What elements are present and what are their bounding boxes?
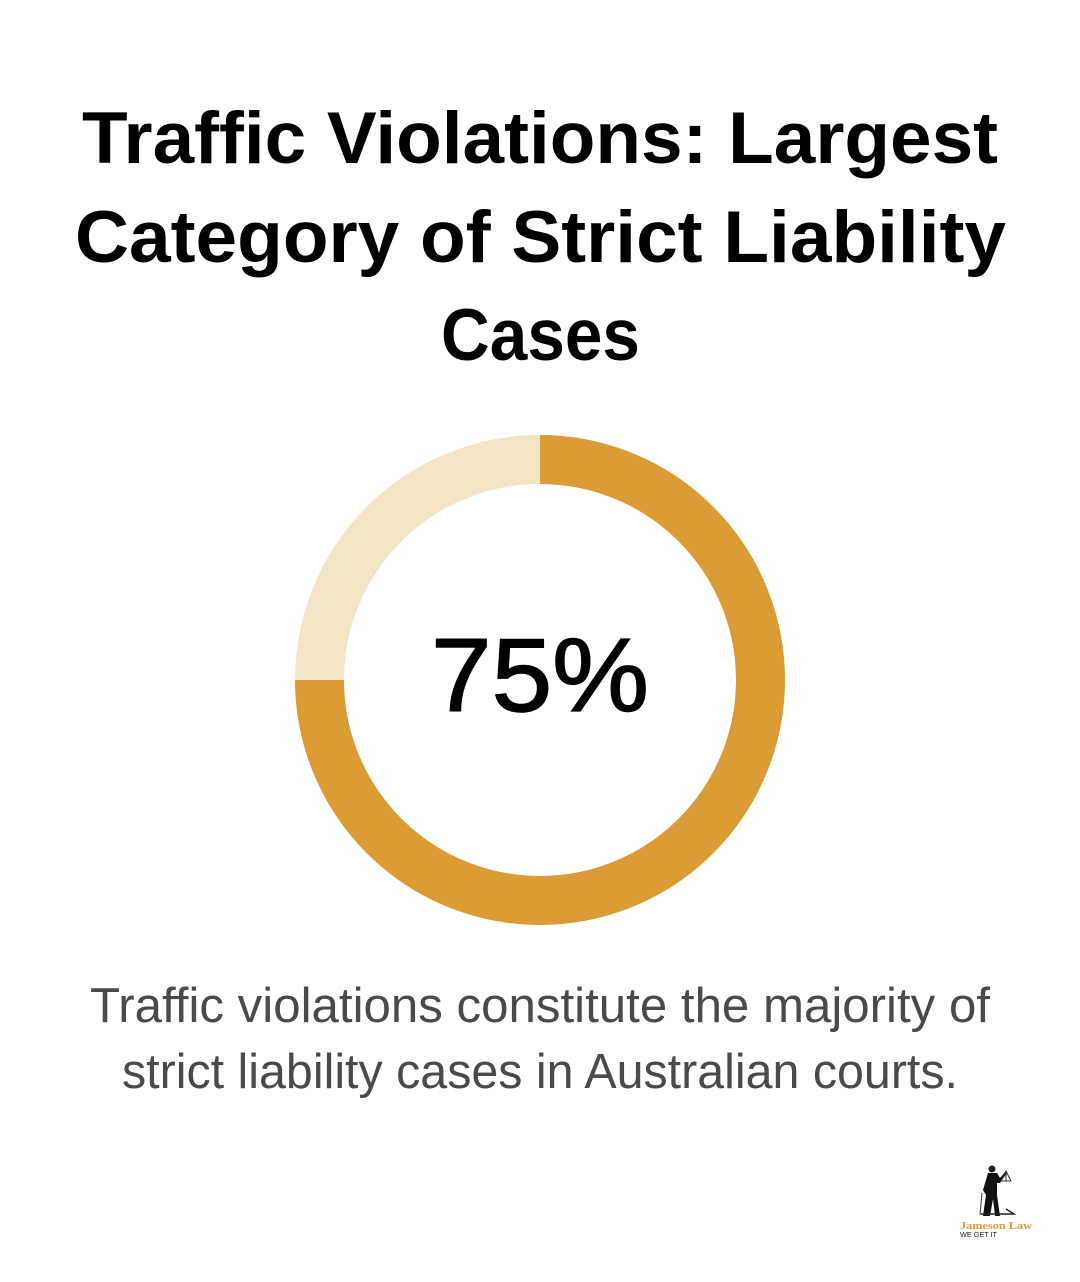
- icon: lady justice: [980, 1166, 1014, 1216]
- description text: [90, 979, 990, 1099]
- title: Category of Strict Liability: [75, 197, 1006, 278]
- donut chart: 75%: [320, 460, 760, 901]
- title: [75, 98, 1006, 376]
- title: Cases: [441, 295, 640, 376]
- description text: Traffic violations constitute the majority of: [90, 979, 990, 1033]
- logo: Jameson Law: [960, 1166, 1032, 1239]
- title: Traffic Violations: Largest: [82, 98, 998, 179]
- percentage value: 75%: [431, 618, 649, 734]
- tagline: WE GET IT: [960, 1232, 998, 1239]
- brand name: Jameson Law: [960, 1221, 1032, 1232]
- description text: strict liability cases in Australian courts.: [122, 1045, 958, 1099]
